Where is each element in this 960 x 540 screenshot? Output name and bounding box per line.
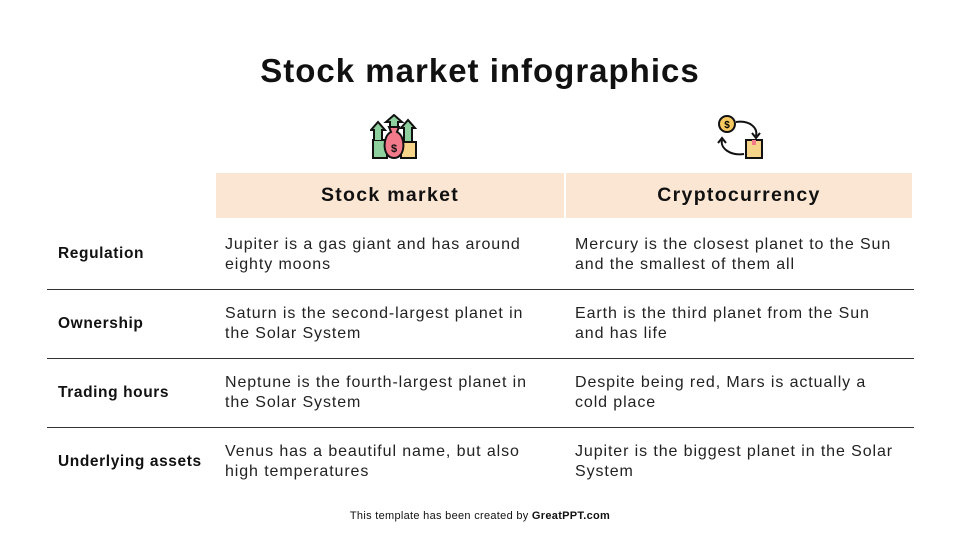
row: Trading hours: Trading hours bbox=[58, 384, 169, 401]
footer: This template has been created by GreatPPT.com bbox=[350, 510, 610, 522]
row: Underlying assets: Venus has a beautiful name, but also bbox=[225, 443, 520, 460]
row: Regulation: Mercury is the closest planet to the Sun bbox=[575, 236, 891, 253]
row: Underlying assets: high temperatures bbox=[225, 462, 369, 480]
row: Regulation: Regulation bbox=[58, 245, 144, 262]
row: Ownership: the Solar System bbox=[225, 324, 361, 342]
header: Cryptocurrency: Cryptocurrency bbox=[657, 184, 821, 206]
row: Underlying assets: System bbox=[575, 462, 634, 480]
row: Regulation: Jupiter is a gas giant and has around bbox=[225, 236, 521, 253]
row: Underlying assets: Underlying assets bbox=[58, 453, 202, 470]
row: Ownership: Earth is the third planet from the Sun bbox=[575, 305, 870, 322]
row: Trading hours bbox=[58, 374, 866, 410]
header: Cryptocurrency bbox=[566, 173, 912, 218]
row: Ownership: Ownership bbox=[58, 315, 144, 332]
row: Regulation: and the smallest of them all bbox=[575, 256, 795, 272]
row: Underlying assets: Jupiter is the biggest planet in the Solar bbox=[575, 443, 893, 460]
row: Regulation: eighty moons bbox=[225, 256, 331, 272]
row: Underlying assets bbox=[58, 443, 893, 480]
icon: money bag with arrows bbox=[370, 114, 418, 159]
title: Stock market infographics bbox=[260, 52, 700, 89]
row: Trading hours: Neptune is the fourth-largest planet in bbox=[225, 374, 527, 391]
row: Trading hours: cold place bbox=[575, 394, 656, 410]
row: Ownership: and has life bbox=[575, 324, 668, 342]
row: Trading hours: Despite being red, Mars is actually a bbox=[575, 374, 866, 391]
icon: money bag with arrows: $ bbox=[391, 143, 397, 155]
header: Stock market: Stock market bbox=[321, 184, 459, 206]
row: Ownership bbox=[58, 305, 870, 342]
row: Ownership: Saturn is the second-largest planet in bbox=[225, 305, 523, 322]
header: Stock market bbox=[216, 173, 564, 218]
row: Regulation bbox=[58, 236, 891, 272]
icon: crypto exchange: $ bbox=[724, 120, 730, 131]
icon: crypto exchange bbox=[717, 115, 763, 159]
row: Trading hours: the Solar System bbox=[225, 394, 361, 410]
